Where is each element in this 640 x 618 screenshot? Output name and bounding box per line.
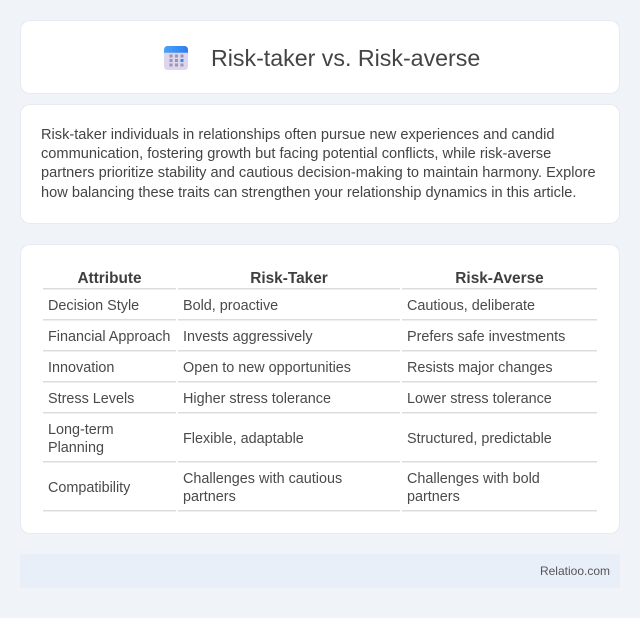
row: financial approach: Prefers safe investments <box>407 329 565 345</box>
row: financial approach: Invests aggressively <box>183 329 313 345</box>
row: compatibility <box>48 471 540 505</box>
footer credit: Relatioo.com <box>540 564 610 578</box>
intro paragraph: communication, fostering growth but facing potential conflicts, while risk-averse <box>41 146 551 162</box>
row: compatibility: Challenges with bold <box>407 471 540 487</box>
row: financial approach <box>48 329 565 345</box>
row: decision style: Bold, proactive <box>183 298 278 314</box>
icon: calendar <box>164 46 188 70</box>
panel: header <box>20 20 620 94</box>
row: innovation: Open to new opportunities <box>183 360 351 376</box>
row: compatibility: Challenges with cautious <box>183 471 342 487</box>
footer <box>20 554 620 588</box>
title: Risk-taker vs. Risk-averse <box>211 45 480 71</box>
row: long-term planning: Flexible, adaptable <box>183 431 304 447</box>
row: stress levels: Lower stress tolerance <box>407 391 552 407</box>
comparison table <box>43 270 597 512</box>
table header: Attribute <box>77 270 142 287</box>
intro paragraph: how balancing these traits can strengthen your relationship dynamics in this article. <box>41 185 576 201</box>
row: innovation <box>48 360 553 376</box>
panel: intro text <box>20 104 620 224</box>
row: compatibility: Compatibility <box>48 480 130 496</box>
row: innovation: Innovation <box>48 360 114 376</box>
row: decision style <box>48 298 535 314</box>
row: long-term planning: Structured, predictable <box>407 431 552 447</box>
intro paragraph: partners prioritize stability and cautious decision-making to maintain harmony. Explore <box>41 165 596 181</box>
intro paragraph: Risk-taker individuals in relationships often pursue new experiences and candid <box>41 127 555 143</box>
table header: Risk-Taker <box>250 270 328 287</box>
intro paragraph <box>41 127 596 201</box>
table header: Risk-Averse <box>455 270 544 287</box>
row: long-term planning: Long-term <box>48 422 114 438</box>
row: innovation: Resists major changes <box>407 360 553 376</box>
row: financial approach: Financial Approach <box>48 329 170 345</box>
row: decision style: Cautious, deliberate <box>407 298 535 314</box>
panel: comparison table <box>20 244 620 534</box>
row: long-term planning <box>48 422 552 456</box>
row: compatibility: partners <box>183 489 236 505</box>
table header <box>77 270 544 287</box>
row: stress levels: Stress Levels <box>48 391 134 407</box>
row: long-term planning: Planning <box>48 440 104 456</box>
row: decision style: Decision Style <box>48 298 139 314</box>
row: compatibility: partners <box>407 489 460 505</box>
row: stress levels <box>48 391 552 407</box>
row: stress levels: Higher stress tolerance <box>183 391 331 407</box>
